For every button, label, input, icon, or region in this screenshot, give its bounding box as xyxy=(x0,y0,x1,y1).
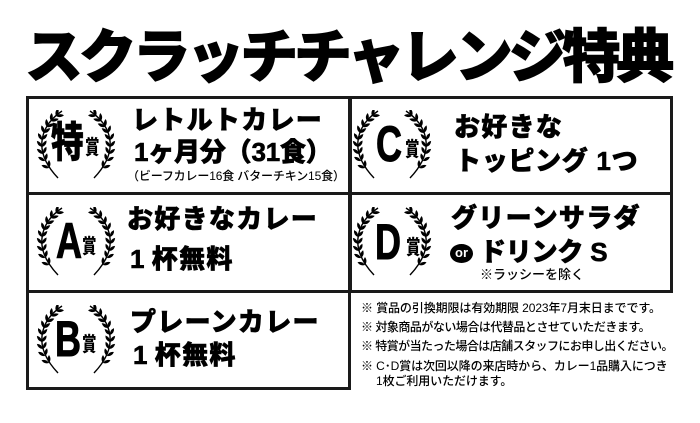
prize name: retort curry: レトルトカレー xyxy=(132,105,323,135)
panel: special prize xyxy=(26,96,351,195)
note 2: ※ 対象商品がない場合は代替品とさせていただきます。 xyxy=(361,320,650,334)
notes block xyxy=(361,301,673,388)
prize name: favorite curry: お好きなカレー xyxy=(127,204,318,234)
note 1: ※ 賞品の引換期限は有効期限 2023年7月末日までです。 xyxy=(361,301,661,315)
prize name: topping: トッピング 1つ xyxy=(455,146,638,176)
panel: prize D xyxy=(349,192,673,293)
prize name: drink S: ドリンク S xyxy=(480,237,607,267)
note 3: ※ 特賞が当たった場合は店舗スタッフにお申し出ください。 xyxy=(361,339,673,353)
panel: prize A xyxy=(26,192,351,293)
icon: laurel wreath C xyxy=(352,110,432,178)
icon: laurel wreath B xyxy=(36,305,116,374)
prize detail: one free: 1杯無料 xyxy=(133,340,237,370)
badge: D prize suffix: 賞 xyxy=(406,237,420,259)
prize detail: one free: 1杯無料 xyxy=(130,244,234,274)
badge: special prize: 特 xyxy=(51,119,84,166)
lassi exclusion note: ※ラッシーを除く xyxy=(480,267,584,282)
icon: laurel wreath special xyxy=(36,110,116,178)
or badge: or xyxy=(455,245,468,260)
panel: prize C xyxy=(349,96,673,195)
title: スクラッチチャレンジ特典 xyxy=(25,25,670,90)
icon: laurel wreath A xyxy=(36,207,116,276)
note 4 continuation: 1枚ご利用いただけます。 xyxy=(376,374,512,388)
note 4: ※ C･D賞は次回以降の来店時から、カレー1品購入につき xyxy=(361,359,668,373)
badge: D prize: D xyxy=(375,214,401,270)
prize quantity: one month: 1ヶ月分（31食） xyxy=(134,137,332,167)
badge: C prize suffix: 賞 xyxy=(405,139,419,161)
badge: C prize: C xyxy=(376,116,402,172)
or badge xyxy=(450,244,473,263)
badge: A prize suffix: 賞 xyxy=(82,236,96,258)
badge: B prize suffix: 賞 xyxy=(82,334,96,356)
prize name: plain curry: プレーンカレー xyxy=(130,307,320,337)
prize name: favorite: お好きな xyxy=(454,112,563,142)
prize breakdown: （ビーフカレー16食 バターチキン15食） xyxy=(127,169,345,183)
badge: A prize: A xyxy=(56,213,82,269)
panel: prize B xyxy=(26,290,351,390)
badge: B prize: B xyxy=(55,311,81,367)
prize name: green salad: グリーンサラダ xyxy=(451,203,641,233)
icon: laurel wreath D xyxy=(352,207,432,276)
badge: special prize suffix: 賞 xyxy=(85,137,99,159)
